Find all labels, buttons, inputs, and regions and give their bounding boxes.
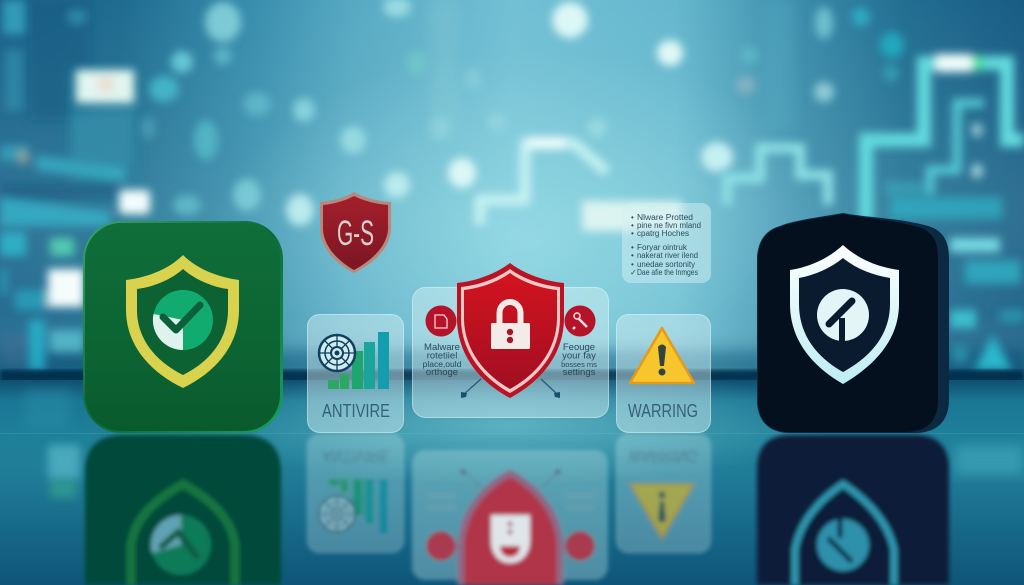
green security card [83, 221, 283, 433]
icon: left red circle [426, 306, 456, 336]
list text: • [631, 260, 634, 269]
info list panel [622, 203, 711, 283]
background: blurred digital city [0, 0, 1024, 430]
left text block: place,ould [423, 359, 462, 369]
left column and text bands [3, 0, 25, 34]
label: warning: WARRING [628, 401, 698, 421]
list text: • [631, 251, 634, 260]
icon: yellow shield with check [126, 255, 239, 388]
right lower blocks [950, 238, 1000, 252]
icon: right red circle [564, 306, 596, 336]
list text [630, 213, 701, 277]
left text block: rotetiiel [427, 350, 457, 362]
arrow: lower left [461, 379, 481, 398]
icon: warning triangle [630, 328, 694, 383]
left lower blocks [0, 232, 26, 256]
list text: Dae afie the Inmges [637, 268, 698, 277]
list text: ✓ [630, 268, 637, 277]
reflection: central shield panel [412, 450, 608, 585]
list text: • [631, 213, 634, 222]
reflection: black card [757, 435, 949, 585]
antivirus panel [308, 314, 404, 432]
list text: • [631, 243, 634, 252]
list text: Nlware Protted [637, 213, 693, 222]
icon: large red shield with lock [457, 263, 564, 398]
right text block: bosses ms [561, 360, 597, 369]
right text block: Feouge [563, 342, 595, 353]
icon: radar wheel [319, 335, 355, 371]
warning panel [616, 314, 710, 432]
reflective floor [0, 365, 1024, 585]
circuit and stepped lines [866, 63, 1024, 222]
list text: unedae sortonity [637, 260, 695, 269]
central shield panel [412, 263, 608, 418]
right text block: your fay [562, 350, 596, 362]
left text block: orthoge [426, 367, 458, 378]
reflection: green card [85, 435, 281, 585]
right text block: settings [563, 367, 596, 378]
list text: cpatrg Hoches [637, 229, 689, 238]
list text: nakerat river ilend [637, 251, 698, 260]
bar chart [328, 332, 389, 389]
list text: Foryar ointruk [637, 243, 688, 252]
list text: pine ne fivn mland [637, 221, 701, 230]
reflection: warning panel [616, 434, 710, 552]
lock [491, 302, 530, 349]
small red shield badge [320, 192, 391, 273]
arrow: lower right [541, 379, 560, 398]
black security card [757, 213, 949, 433]
right text block [561, 342, 597, 378]
label: antivirus: ANTIVIRE [322, 401, 390, 421]
icon: white shield with pin [790, 245, 899, 384]
left text block: Malware [424, 342, 460, 353]
reflection: antivirus panel [308, 434, 404, 552]
list text: • [631, 229, 634, 238]
left text block [423, 342, 462, 378]
floating light spots [67, 9, 87, 25]
list text: • [631, 221, 634, 230]
badge glyph: G-S [337, 214, 374, 253]
